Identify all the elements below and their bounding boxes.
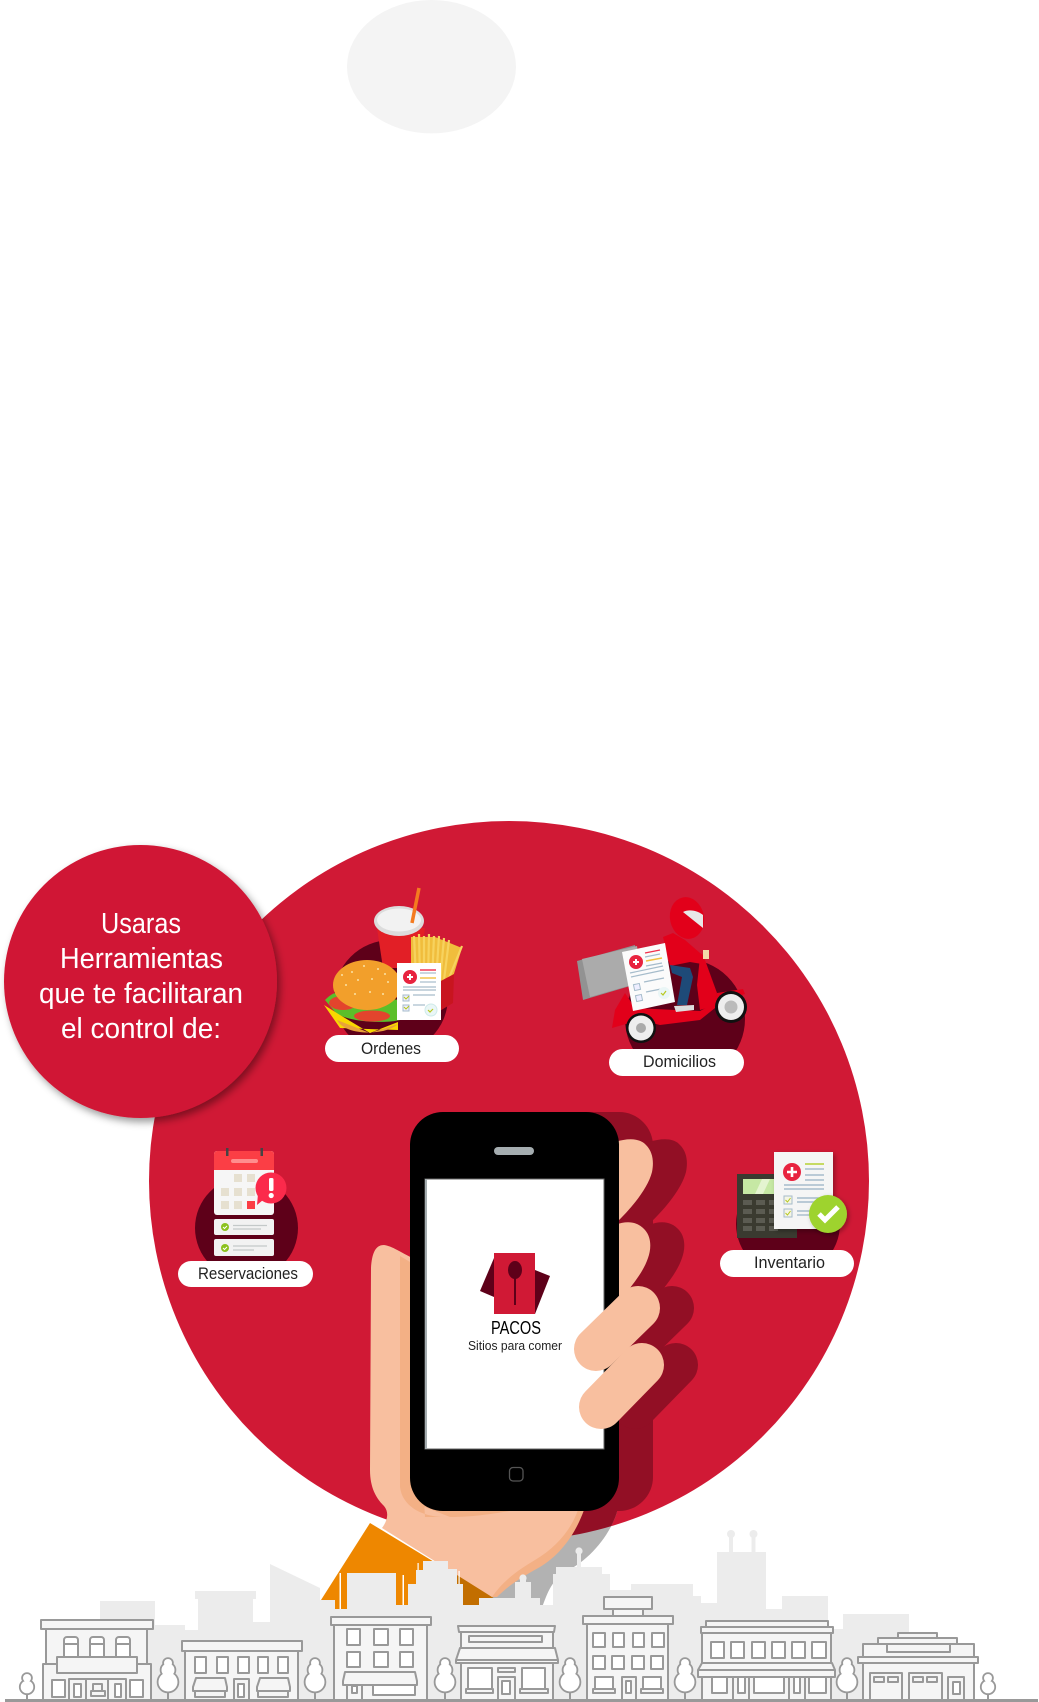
callout text: el control de:: [61, 1013, 221, 1045]
callout text: que te facilitaran: [39, 978, 243, 1010]
hand palm and thumb: [370, 1245, 584, 1597]
building 4: [456, 1626, 558, 1700]
hand shadow outside the circle: [480, 1500, 617, 1610]
upper fingers: [615, 1139, 653, 1304]
phone and hand shadow on the circle: [572, 1112, 698, 1536]
phone home button: [510, 1468, 523, 1481]
icon: domicilios: [577, 897, 747, 1050]
label: Domicilios: Domicilios: [643, 1052, 716, 1071]
lower fingers over the phone: [596, 1308, 642, 1407]
logo PACOS: [468, 1253, 563, 1353]
callout circle: [4, 845, 277, 1118]
brand name: PACOS: [491, 1318, 541, 1338]
building 2: [182, 1641, 302, 1700]
label: Inventario: Inventario: [754, 1253, 825, 1272]
callout text: [39, 908, 243, 1045]
label: Inventario: [720, 1250, 854, 1277]
label: Reservaciones: [178, 1261, 313, 1287]
callout text: Usaras: [101, 908, 181, 940]
top pale ellipse: [347, 0, 516, 133]
sleeve: [321, 1523, 500, 1612]
phone speaker: [494, 1147, 534, 1155]
background city silhouette: [100, 1530, 909, 1702]
label: Ordenes: Ordenes: [361, 1039, 421, 1058]
label: Ordenes: [325, 1035, 459, 1062]
label: Reservaciones: Reservaciones: [198, 1264, 298, 1283]
building 5: [583, 1597, 673, 1700]
trees: [21, 1659, 994, 1700]
callout text: Herramientas: [60, 943, 223, 975]
panel: big red circle: [149, 821, 869, 1541]
building 3: [331, 1617, 431, 1700]
brand tagline: Sitios para comer: [468, 1338, 563, 1353]
icon: ordenes: [324, 888, 462, 1054]
ground line: [5, 1699, 1038, 1702]
thin white gaps in silhouette: [340, 1563, 460, 1609]
phone: [410, 1112, 619, 1511]
building 6: [698, 1621, 835, 1700]
phone screen: [425, 1179, 604, 1449]
building 1: [41, 1620, 153, 1700]
icon: reservaciones: [195, 1148, 298, 1280]
icon: inventario: [736, 1152, 847, 1276]
building 7: [858, 1633, 978, 1700]
label: Domicilios: [609, 1049, 744, 1076]
